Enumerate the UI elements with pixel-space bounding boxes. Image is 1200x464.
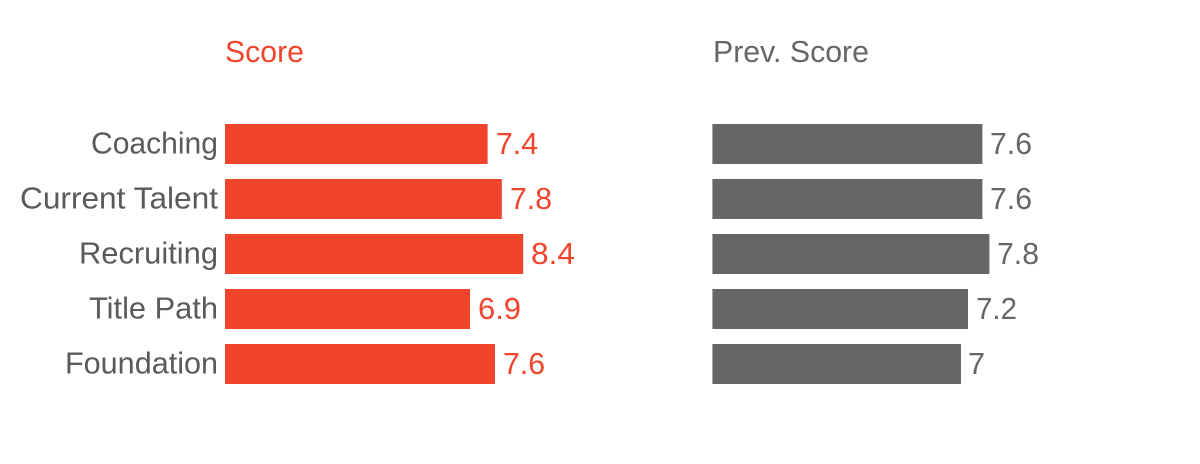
row labels: Recruiting: [79, 237, 218, 271]
bar values: Score: [478, 127, 575, 381]
bar values: Score: 7.4: [496, 127, 538, 161]
row labels: Foundation: [65, 347, 218, 381]
bar values: Score: 8.4: [531, 237, 575, 271]
row labels: [20, 127, 219, 381]
panel: Score: [225, 35, 575, 384]
row labels: Current Talent: [20, 182, 219, 216]
bar chart: Score bars: [225, 124, 523, 384]
bar values: Prev. Score: [968, 127, 1039, 381]
bar values: Score: 7.8: [510, 182, 552, 216]
bar values: Prev. Score: 7: [968, 347, 985, 381]
row labels: Title Path: [89, 292, 218, 326]
bar values: Score: 6.9: [478, 292, 521, 326]
panel: Prev. Score: [712, 35, 1039, 384]
bar values: Prev. Score: 7.8: [997, 237, 1039, 271]
bar values: Score: 7.6: [503, 347, 545, 381]
heading: Prev. Score: Prev. Score: [713, 35, 869, 69]
bar chart: Prev. Score bars: [712, 124, 989, 384]
bar values: Prev. Score: 7.6: [990, 182, 1032, 216]
row labels: Coaching: [91, 127, 218, 161]
bar values: Prev. Score: 7.2: [976, 292, 1017, 326]
heading: Score: Score: [225, 35, 304, 69]
bar values: Prev. Score: 7.6: [990, 127, 1032, 161]
